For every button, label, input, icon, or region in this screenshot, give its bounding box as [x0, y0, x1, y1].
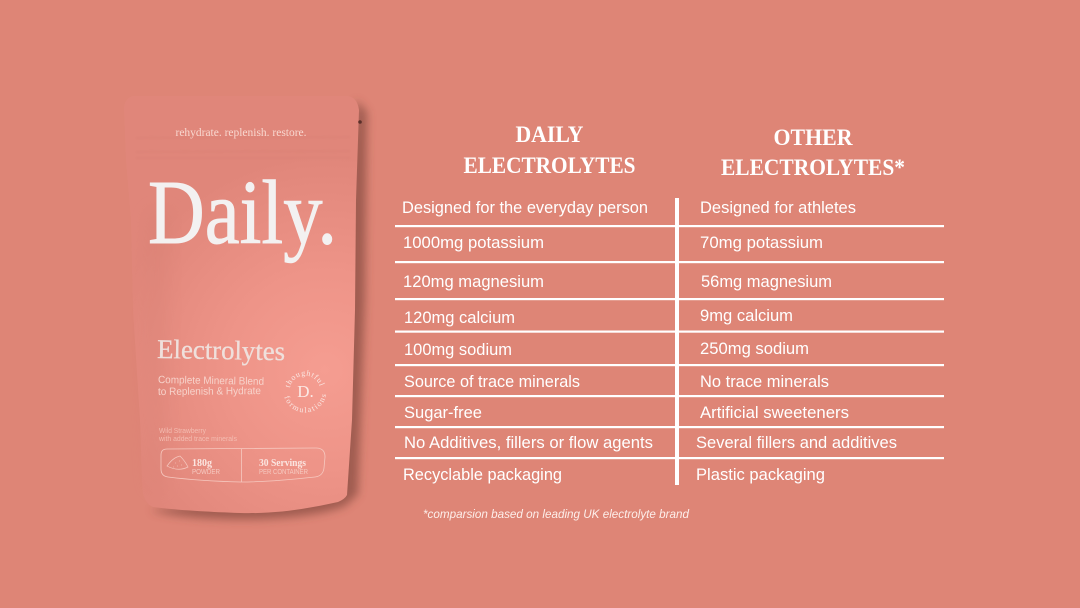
Daily column rows: Source of trace minerals	[404, 373, 580, 391]
footnote: *comparsion based on leading UK electrolyte brand	[423, 507, 689, 521]
weight label	[192, 458, 220, 476]
round badge	[284, 370, 326, 413]
Other column rows: No trace minerals	[700, 373, 829, 391]
Daily column rows: Designed for the everyday person	[402, 199, 648, 217]
Daily column rows: 120mg calcium	[404, 309, 515, 327]
Other column rows: Artificial sweeteners	[700, 404, 849, 422]
Other column rows: Several fillers and additives	[696, 434, 897, 452]
servings label: 30 Servings	[259, 458, 306, 469]
heading: Daily Electrolytes	[464, 122, 636, 178]
round badge: formulations	[284, 394, 326, 413]
Other column rows: 56mg magnesium	[701, 273, 832, 291]
Daily column rows: Recyclable packaging	[403, 466, 562, 484]
Daily column rows: 120mg magnesium	[403, 273, 544, 291]
product description	[158, 374, 264, 398]
pouch top seal lines	[136, 137, 350, 158]
Other column rows: Designed for athletes	[700, 199, 856, 217]
Other column rows: 9mg calcium	[700, 307, 793, 325]
info box divider	[240, 449, 242, 482]
brand wordmark: Daily.	[148, 162, 337, 263]
pouch left shading	[141, 210, 172, 490]
round badge: D.	[297, 382, 314, 401]
Other column rows	[696, 199, 897, 484]
Other column rows: Plastic packaging	[696, 466, 825, 484]
flavour note: Wild Strawberry	[159, 428, 206, 435]
weight label: 180g	[192, 458, 212, 469]
Other column rows: 250mg sodium	[700, 340, 809, 358]
round badge: thoughtful	[286, 370, 325, 388]
flavour note	[158, 428, 237, 443]
product description: to Replenish & Hydrate	[158, 385, 261, 398]
pouch shadow	[150, 100, 367, 519]
servings label: PER CONTAINER	[259, 469, 308, 476]
powder icon	[167, 456, 188, 469]
pouch tear notch	[358, 120, 362, 124]
info box	[161, 448, 325, 482]
Daily column rows: 1000mg potassium	[403, 234, 544, 252]
Daily column rows	[402, 199, 653, 484]
Daily column rows: 100mg sodium	[404, 341, 512, 359]
comparison table grid	[395, 198, 944, 485]
servings label	[259, 458, 308, 476]
heading: Daily Electrolytes: DAILY	[516, 122, 584, 147]
product name: Electrolytes	[157, 334, 285, 366]
heading: Daily Electrolytes: ELECTROLYTES	[464, 153, 636, 178]
flavour note: with added trace minerals	[158, 436, 237, 443]
heading: Other Electrolytes: OTHER	[774, 125, 853, 150]
Daily column rows: No Additives, fillers or flow agents	[404, 434, 653, 452]
pouch body	[124, 96, 359, 513]
heading: Other Electrolytes: ELECTROLYTES*	[721, 155, 905, 180]
product description: Complete Mineral Blend	[158, 374, 264, 388]
tagline: rehydrate. replenish. restore.	[176, 127, 307, 139]
heading: Other Electrolytes	[721, 125, 905, 180]
Daily column rows: Sugar-free	[404, 404, 482, 422]
product pouch	[148, 100, 372, 524]
weight label: POWDER	[192, 469, 220, 476]
Other column rows: 70mg potassium	[700, 234, 823, 252]
